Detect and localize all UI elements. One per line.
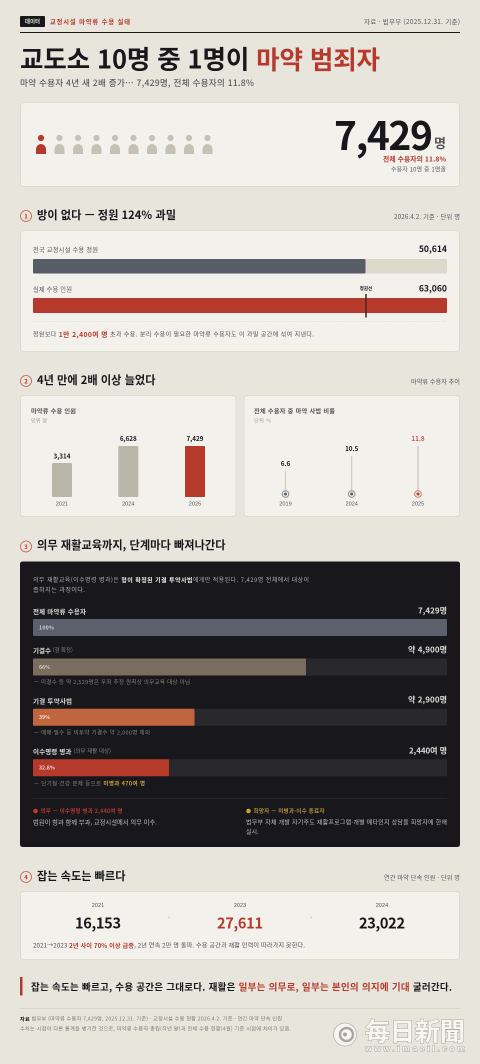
footnotes: 수치는 시점이 다른 통계를 병기한 것으로, 마약류 수용자 총원(작년 말)과 전체 수용 현황(4월) 기준 시점에 차이가 있음.	[20, 1024, 292, 1032]
stat 2024	[359, 903, 405, 934]
footnotes: 자료 법무부 (마약류 수용자 7,429명, 2025.12.31. 기준) · 교정시설 수용 현황 2026.4.2. 기준 · 연간 마약 단속 인원	[20, 1014, 282, 1022]
watermark	[334, 1012, 465, 1053]
actual row: 63,060	[419, 282, 447, 294]
funnel step: indicted: 약 4,900명	[408, 644, 447, 656]
lollipop 2019: 6.6	[281, 459, 291, 468]
share caption: 수용자 10명 중 1명꼴	[391, 164, 446, 174]
newspaper name: 每日新聞	[365, 1012, 465, 1048]
bar 2025	[185, 434, 205, 508]
funnel intro	[33, 575, 309, 594]
funnel step: indicted: 기결수 (형 확정)	[33, 645, 73, 655]
funnel step: drug convicts: 기결 투약사범	[33, 696, 72, 706]
section heading 4: 4	[24, 872, 28, 882]
funnel step: drug convicts	[33, 694, 447, 736]
stat 2023: 27,611	[217, 912, 263, 934]
legend: voluntary	[246, 807, 447, 836]
capacity row: 전국 교정시설 수용 정원	[33, 245, 98, 254]
stat 2021: 16,153	[75, 912, 121, 934]
bar 2021	[52, 452, 72, 508]
bar 2021: 3,314	[54, 452, 71, 460]
funnel step: indicted: — 미결수 등 약 2,529명은 무죄 추정 원칙상 의무교육 대상 아님	[34, 678, 190, 686]
funnel step: drug convicts: 39%	[39, 714, 50, 721]
panel: funnel	[20, 562, 460, 847]
big number: 7,429	[334, 106, 433, 162]
stat 2024: 23,022	[359, 912, 405, 934]
panel: hero stat	[20, 102, 460, 186]
panel: drug inmate bar chart: 단위 명	[31, 416, 47, 424]
logo mark	[334, 1023, 356, 1046]
legend: voluntary: 희망자 — 미병과·이수 종료자	[254, 807, 325, 815]
conclusion callout: 잡는 속도는 빠르고, 수용 공간은 그대로다. 재활은 일부는 의무로, 일부는 본인의 의지에 기대 굴러간다.	[31, 980, 452, 994]
section heading 3: 의무 재활교육까지, 단계마다 빠져나간다	[37, 537, 226, 553]
arrow: ›	[310, 915, 312, 921]
lollipop 2024: 10.5	[345, 444, 359, 453]
funnel step: drug convicts: — 매매·밀수 등 비투약 기결수 약 2,000명 제외	[34, 728, 150, 736]
lollipop 2025: 11.8	[411, 434, 425, 443]
stat 2021: 2021	[92, 903, 104, 909]
actual row: 실제 수용 인원	[33, 284, 72, 294]
section heading 4: 연간 마약 단속 인원 · 단위 명	[384, 873, 460, 882]
legend: mandatory	[33, 807, 157, 826]
lollipop 2025	[411, 434, 425, 508]
panel: share lollipop chart: 전체 수용자 중 마약 사범 비율	[254, 406, 335, 416]
section heading 1	[20, 207, 460, 223]
panel: share lollipop chart	[244, 396, 460, 516]
section heading 3: 3	[24, 542, 28, 551]
bar 2021: 2021	[56, 502, 68, 508]
section heading 2	[20, 372, 460, 388]
lollipop 2019: 2019	[279, 502, 292, 508]
lollipop 2024: 2024	[345, 502, 358, 508]
bar 2025: 7,429	[187, 434, 204, 443]
funnel step: drug convicts: 약 2,900명	[408, 694, 447, 706]
badge	[20, 16, 45, 27]
panel: share lollipop chart: 단위 %	[254, 416, 271, 424]
stat 2024: 2024	[376, 903, 388, 909]
stat 2021	[75, 903, 121, 934]
lollipop 2019	[279, 459, 292, 508]
title: 교도소 10명 중 1명이 마약 범죄자	[20, 40, 380, 76]
icon row: 1 in 10 people	[36, 135, 212, 154]
subtitle: 마약 수용자 4년 새 2배 증가… 7,429명, 전체 수용자의 11.8%	[20, 77, 254, 89]
funnel step: mandated: — 단기형·건강 문제 등으로 미병과 470여 명	[34, 780, 145, 788]
source note: 자료 · 법무부 (2025.12.31. 기준)	[364, 17, 460, 26]
section heading 2: 2	[24, 376, 28, 386]
lollipop 2025: 2025	[412, 502, 424, 508]
lollipop 2024	[345, 444, 359, 508]
panel: drug inmate bar chart	[20, 396, 236, 516]
section heading 4	[20, 868, 460, 884]
funnel step: mandated: 32.8%	[39, 764, 55, 772]
section heading 1: 방이 없다 — 정원 124% 과밀	[37, 207, 176, 223]
stat 2023: 2023	[234, 903, 246, 909]
funnel step: all: 전체 마약류 수용자	[33, 606, 86, 616]
section heading 4: 잡는 속도는 빠르다	[37, 868, 126, 884]
bar 2025: 2025	[189, 502, 201, 508]
capacity note: 정원보다 1만 2,400여 명 초과 수용. 분리 수용이 필요한 마약류 수용자도 이 과밀 공간에 섞여 지낸다.	[33, 329, 314, 339]
funnel step: all: 100%	[39, 624, 54, 632]
kicker: 교정시설 마약류 수용 실태	[50, 17, 130, 26]
funnel intro: 좁혀지는 과정이다.	[33, 585, 85, 594]
section heading 1: 1	[24, 212, 28, 220]
footnotes	[20, 1014, 292, 1032]
actual row	[33, 282, 447, 313]
stat 2023	[217, 903, 263, 934]
funnel step: all	[33, 606, 447, 636]
funnel step: mandated: 2,440여 명	[409, 746, 447, 756]
legend: voluntary: 법무부 자체 개발 자기주도 재활프로그램·개별 메타인지 상담을 희망자에 한해	[246, 818, 447, 826]
panel: enforcement numbers	[20, 892, 460, 960]
legend: voluntary: 실시.	[246, 827, 259, 836]
panel: capacity vs actual	[20, 230, 460, 352]
funnel step: mandated	[33, 746, 447, 788]
capacity row: 50,614	[419, 243, 447, 255]
funnel step: all: 7,429명	[418, 606, 447, 616]
legend: mandatory: 의무 — 이수명령 병과 2,440여 명	[40, 807, 122, 815]
badge: 데이터	[25, 18, 40, 26]
capacity marker	[360, 285, 372, 318]
panel: drug inmate bar chart: 마약류 수용 인원	[31, 406, 76, 416]
funnel step: mandated: 이수명령 병과 (의무 재활 대상)	[33, 746, 111, 756]
section heading 1: 2026.4.2. 기준 · 단위 명	[394, 212, 460, 221]
share text: 전체 수용자의 11.8%	[383, 154, 446, 164]
legend: mandatory: 법원이 형과 함께 부과, 교정시설에서 의무 이수.	[33, 818, 157, 826]
funnel step: indicted	[33, 644, 447, 686]
bar 2024	[118, 434, 138, 508]
bar 2024: 2024	[122, 502, 135, 508]
header bar	[20, 16, 460, 33]
unit: 명	[434, 133, 446, 152]
funnel intro: 의무 재활교육(이수명령 병과)은 형이 확정된 기결 투약사범에게만 적용된다. 7,429명 전체에서 대상이	[33, 575, 309, 584]
arrow: ›	[168, 915, 170, 921]
watermark url: www.imaeil.com	[364, 1043, 465, 1053]
bar 2024: 6,628	[120, 434, 137, 443]
capacity row	[33, 243, 447, 274]
section heading 2: 4년 만에 2배 이상 늘었다	[37, 372, 156, 388]
funnel step: indicted: 66%	[39, 664, 50, 671]
enforcement note: 2021→2023 2년 사이 70% 이상 급증, 2년 연속 2만 명 돌파. 수용 공간과 재활 인력이 따라가지 못한다.	[33, 940, 305, 950]
section heading 2: 마약류 수용자 추이	[411, 377, 460, 386]
capacity marker: 정원선	[360, 285, 372, 292]
